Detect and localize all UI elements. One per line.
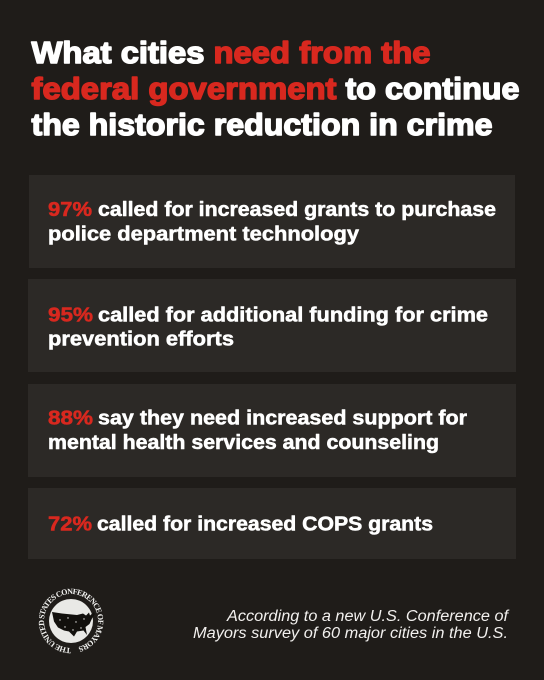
- icon: US Conference of Mayors seal: THE UNITED STATES CONFERENCE OF MAYORS: [38, 588, 104, 654]
- title: the historic reduction in crime: [32, 107, 493, 142]
- panel: 72% COPS grants: 72%: [48, 514, 92, 536]
- panel: 88% mental health: [28, 384, 516, 477]
- title: need from the: [214, 35, 430, 70]
- panel: 97% technology grants: called for increased grants to purchase: [98, 199, 496, 221]
- panel: 95% crime prevention: [28, 279, 516, 372]
- panel: 72% COPS grants: called for increased COPS grants: [97, 514, 433, 536]
- icon: US map silhouette: [52, 612, 95, 636]
- panel: 72% COPS grants: [28, 488, 516, 559]
- title: federal government: [32, 71, 336, 106]
- source note: According to a new U.S. Conference of: [226, 608, 510, 625]
- panel: 97% technology grants: police department technology: [48, 224, 360, 246]
- title: to continue: [346, 71, 520, 106]
- panel: 95% crime prevention: prevention efforts: [48, 328, 234, 350]
- source note: Mayors survey of 60 major cities in the U.S.: [193, 625, 508, 642]
- panel: 95% crime prevention: 95%: [48, 304, 93, 326]
- title: [32, 35, 520, 142]
- panel: 88% mental health: 88%: [48, 408, 93, 430]
- title: What cities: [32, 35, 204, 70]
- panel: 88% mental health: mental health services and counseling: [48, 432, 439, 454]
- source note: [193, 608, 510, 642]
- panel: 97% technology grants: 97%: [48, 199, 92, 221]
- panel: 88% mental health: say they need increased support for: [98, 408, 467, 430]
- panel: 97% technology grants: [29, 175, 515, 268]
- panel: 95% crime prevention: called for additional funding for crime: [98, 304, 488, 326]
